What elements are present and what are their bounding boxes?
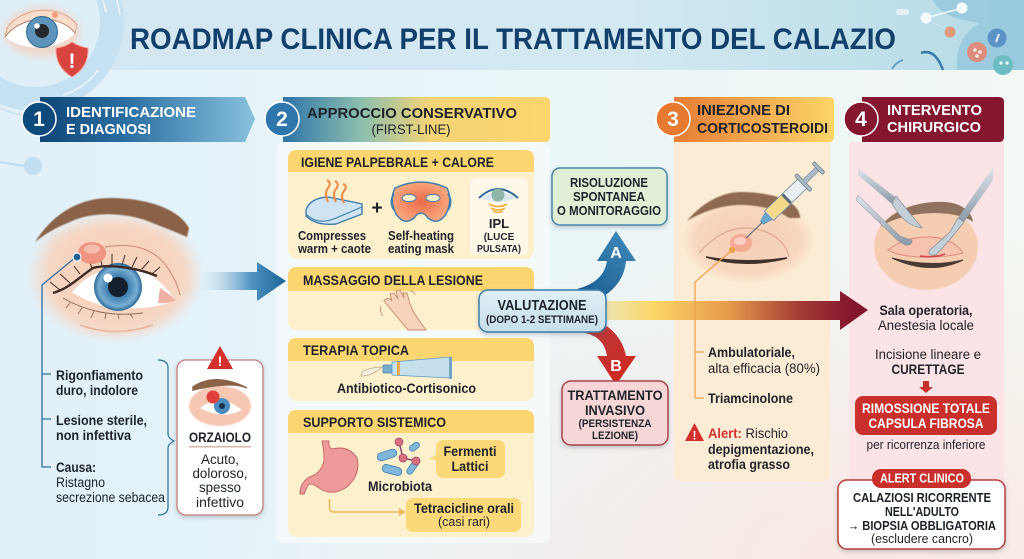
card: stye comparison: spesso	[199, 480, 241, 495]
alert: injection risk	[685, 423, 814, 472]
lashes	[53, 266, 157, 293]
box: spontaneous resolution: RISOLUZIONE	[570, 175, 648, 190]
icon: IPL eye	[479, 188, 518, 212]
box: total capsule removal	[855, 396, 997, 435]
box: assessment	[479, 290, 606, 332]
box: invasive treatment: (PERSISTENZA	[578, 418, 652, 430]
icon: surgical instruments	[856, 167, 993, 255]
arrow: to capsule removal	[919, 381, 933, 393]
card: stye comparison: Acuto,	[201, 452, 239, 467]
card: stye comparison: ORZAIOLO	[189, 430, 251, 445]
arrow: diagnosis to conservative approach	[200, 262, 286, 301]
panel: eyelid hygiene and heat: (LUCE	[484, 232, 515, 243]
step 3 header: CORTICOSTEROIDI	[697, 120, 828, 137]
icon: warning triangle	[207, 346, 233, 369]
text: clinical findings: Ristagno	[56, 475, 105, 490]
callout: oral tetracyclines	[406, 498, 521, 532]
icon: microbiota	[376, 438, 421, 476]
panel: massage: MASSAGGIO DELLA LESIONE	[303, 272, 483, 288]
alert pill: ALERT CLINICO	[880, 470, 964, 486]
box: invasive treatment: TRATTAMENTO	[568, 387, 663, 403]
eyebrow	[35, 198, 189, 242]
clinical alert card: (escludere cancro)	[871, 532, 973, 546]
icon: syringe	[738, 159, 827, 246]
step 4 header: 4	[855, 108, 867, 131]
panel: eyelid hygiene and heat: IGIENE PALPEBRALE + CALORE	[301, 154, 494, 170]
panel: eyelid hygiene and heat: IPL	[489, 216, 509, 231]
alert pill	[872, 469, 971, 488]
text: clinical findings: duro, indolore	[56, 383, 138, 398]
callout: lactic ferments: Fermenti	[444, 444, 496, 459]
panel: eyelid hygiene and heat	[288, 150, 534, 259]
box: assessment: VALUTAZIONE	[498, 298, 587, 314]
clinical alert card: → BIOPSIA OBBLIGATORIA	[848, 518, 997, 533]
icon: warning triangle: !	[218, 353, 222, 369]
text: injection notes	[708, 345, 820, 406]
step 1 header: 1	[33, 108, 45, 131]
eye globe	[72, 267, 175, 308]
text: lower recurrence: per ricorrenza inferiore	[866, 438, 986, 452]
text: clinical findings: Rigonfiamento	[56, 368, 143, 383]
illustration: injection eye	[680, 192, 816, 284]
alert: injection risk: Alert: Rischio	[708, 426, 788, 441]
box: invasive treatment	[562, 381, 668, 445]
decorative ring	[0, 0, 120, 175]
panel: eyelid hygiene and heat: warm + caote	[297, 241, 371, 256]
box: spontaneous resolution: O MONITORAGGIO	[557, 203, 661, 218]
step 2 header: 2	[276, 108, 288, 131]
text: clinical findings: Lesione sterile,	[56, 413, 147, 428]
text: clinical findings: Causa:	[56, 460, 96, 475]
panel: corticosteroid column	[674, 142, 830, 481]
arrow: assessment to surgery	[600, 291, 868, 330]
plus sign: +	[371, 198, 383, 219]
icon: massaging hand	[380, 290, 426, 330]
box: invasive treatment: LEZIONE)	[592, 430, 638, 442]
text: clinical findings: non infettiva	[56, 428, 131, 443]
clinical alert card	[838, 469, 1005, 549]
panel: eyelid hygiene and heat: Self-heating	[388, 228, 454, 243]
step 2 header	[265, 97, 550, 142]
pointer line and injection notes	[695, 248, 734, 398]
main title: ROADMAP CLINICA PER IL TRATTAMENTO DEL CALAZIO	[130, 23, 896, 56]
text: injection notes: Triamcinolone	[708, 391, 793, 406]
icon: warm towel	[306, 180, 362, 224]
panel: eyelid hygiene and heat: eating mask	[388, 241, 455, 256]
icon: eye with warning shield: !	[68, 50, 76, 73]
box: total capsule removal: CAPSULA FIBROSA	[868, 415, 984, 431]
icon: self-heating mask	[392, 182, 450, 221]
text: injection notes: Ambulatoriale,	[708, 345, 795, 360]
box: spontaneous resolution	[552, 168, 667, 225]
step 3 header: 3	[667, 108, 679, 131]
callout: lactic ferments	[429, 440, 505, 478]
text: surgery steps: Anestesia locale	[878, 318, 974, 333]
arrow B: down to invasive treatment: B	[610, 358, 622, 375]
panel: conservative approach background	[276, 142, 550, 543]
step 4 header: INTERVENTO	[887, 102, 982, 119]
panel: topical therapy: TERAPIA TOPICA	[303, 342, 409, 358]
panel: systemic support	[288, 410, 534, 537]
text: surgery steps: Incisione lineare e	[875, 347, 981, 362]
illustration: surgical eye	[874, 202, 978, 290]
panel: systemic support: Microbiota	[368, 479, 432, 494]
callout: lactic ferments: Lattici	[452, 459, 488, 474]
panel: massage	[288, 267, 534, 330]
panel: systemic support: SUPPORTO SISTEMICO	[303, 414, 446, 430]
box: spontaneous resolution: SPONTANEA	[573, 189, 646, 204]
text: clinical findings: secrezione sebacea	[56, 490, 165, 505]
step 3 header	[656, 97, 834, 142]
callout: oral tetracyclines: (casi rari)	[438, 515, 490, 529]
icon: stye eye	[189, 380, 251, 426]
box: total capsule removal: RIMOSSIONE TOTALE	[862, 400, 990, 416]
panel: topical therapy	[288, 338, 534, 401]
alert: injection risk: !	[692, 428, 696, 442]
panel: eyelid hygiene and heat: PULSATA)	[477, 244, 521, 255]
panel: surgery column	[849, 142, 1004, 488]
callout: oral tetracyclines: Tetracicline orali	[414, 501, 514, 516]
clinical alert card: NELL'ADULTO	[885, 504, 959, 519]
step 4 header	[844, 97, 1004, 142]
brace	[158, 360, 174, 515]
step 3 header: INIEZIONE DI	[697, 102, 790, 119]
step 1 header: E DIAGNOSI	[66, 121, 151, 138]
card: stye comparison: infettivo	[196, 495, 244, 510]
stye bump	[78, 242, 106, 264]
icon: stomach	[300, 441, 358, 494]
text: clinical findings	[56, 368, 165, 505]
panel: eyelid hygiene and heat: Compresses	[298, 228, 366, 243]
decorative molecules	[892, 2, 1013, 75]
text: surgery steps	[875, 303, 981, 377]
step 1 header: IDENTIFICAZIONE	[66, 104, 196, 121]
arrow to tetracyclines	[330, 499, 406, 516]
panel: topical therapy: Antibiotico-Cortisonico	[337, 381, 476, 396]
arrow A: up to spontaneous resolution: A	[610, 245, 622, 262]
icon: eye with warning shield	[4, 7, 88, 77]
arrow A: up to spontaneous resolution	[577, 231, 636, 296]
arrow B: down to invasive treatment	[580, 325, 636, 385]
step 2 header: APPROCCIO CONSERVATIVO	[307, 105, 517, 122]
step 2 header: (FIRST-LINE)	[372, 122, 450, 137]
card: stye comparison: doloroso,	[192, 466, 248, 481]
box: assessment: (DOPO 1-2 SETTIMANE)	[486, 314, 598, 326]
card: stye comparison	[177, 346, 263, 515]
header banner	[0, 0, 1024, 70]
text: surgery steps: CURETTAGE	[892, 362, 964, 377]
large eye illustration	[25, 198, 205, 343]
clinical alert card: CALAZIOSI RICORRENTE	[853, 490, 991, 505]
box: invasive treatment: INVASIVO	[585, 402, 645, 418]
step 1 header	[22, 97, 255, 142]
alert: injection risk: atrofia grasso	[708, 457, 790, 472]
icon: ointment tube	[361, 357, 452, 379]
alert: injection risk: depigmentazione,	[708, 442, 814, 457]
pointer line and findings bracket	[42, 253, 81, 467]
text: injection notes: alta efficacia (80%)	[708, 361, 820, 376]
text: surgery steps: Sala operatoria,	[880, 303, 972, 318]
step 4 header: CHIRURGICO	[887, 119, 981, 136]
